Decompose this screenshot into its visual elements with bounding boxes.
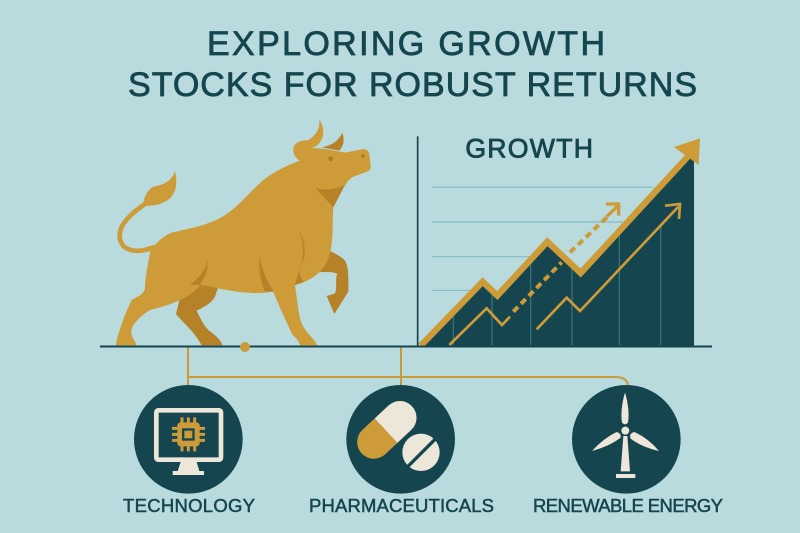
y axis: [415, 136, 420, 346]
capsule: [350, 394, 423, 466]
icon: renewable energy: [572, 385, 681, 494]
label: pharmaceuticals: PHARMACEUTICALS: [309, 495, 494, 516]
turbine blades: [621, 392, 629, 424]
tail tuft: [143, 171, 176, 206]
label: renewable energy: RENEWABLE ENERGY: [533, 495, 723, 516]
monitor stand: [173, 462, 204, 475]
body: [116, 119, 371, 345]
ground line: [100, 346, 712, 348]
main trend line: [421, 156, 689, 346]
lower arrow head: [665, 204, 680, 219]
far horn: [322, 133, 344, 151]
connector lines: [188, 346, 628, 387]
turbine tower: [621, 436, 630, 471]
grid lines: [432, 187, 653, 290]
label: technology: TECHNOLOGY: [123, 495, 255, 516]
baseline over chart: [420, 346, 712, 348]
icon: pharmaceuticals: [346, 385, 455, 494]
title: [128, 25, 697, 104]
tablet: [402, 434, 440, 471]
icon: bull: [116, 119, 371, 345]
bar dividers: [453, 225, 661, 345]
far legs: [176, 283, 223, 345]
icon: technology: [134, 385, 243, 494]
heading: growth: GROWTH: [465, 133, 593, 163]
title: STOCKS FOR ROBUST RETURNS: [128, 66, 697, 104]
node dot: [240, 342, 250, 352]
title: EXPLORING GROWTH: [207, 25, 605, 63]
secondary line: [449, 308, 510, 345]
tail: [120, 204, 155, 251]
arrow head: [674, 138, 700, 165]
chip: [172, 417, 205, 451]
dashed arrow head: [606, 204, 619, 217]
chart: growth: [418, 133, 700, 346]
monitor: [156, 410, 221, 460]
eye and nostril: [328, 156, 333, 161]
dashed line: [513, 262, 562, 312]
lower line: [537, 207, 678, 329]
area: [422, 153, 694, 346]
shading: [315, 185, 345, 207]
